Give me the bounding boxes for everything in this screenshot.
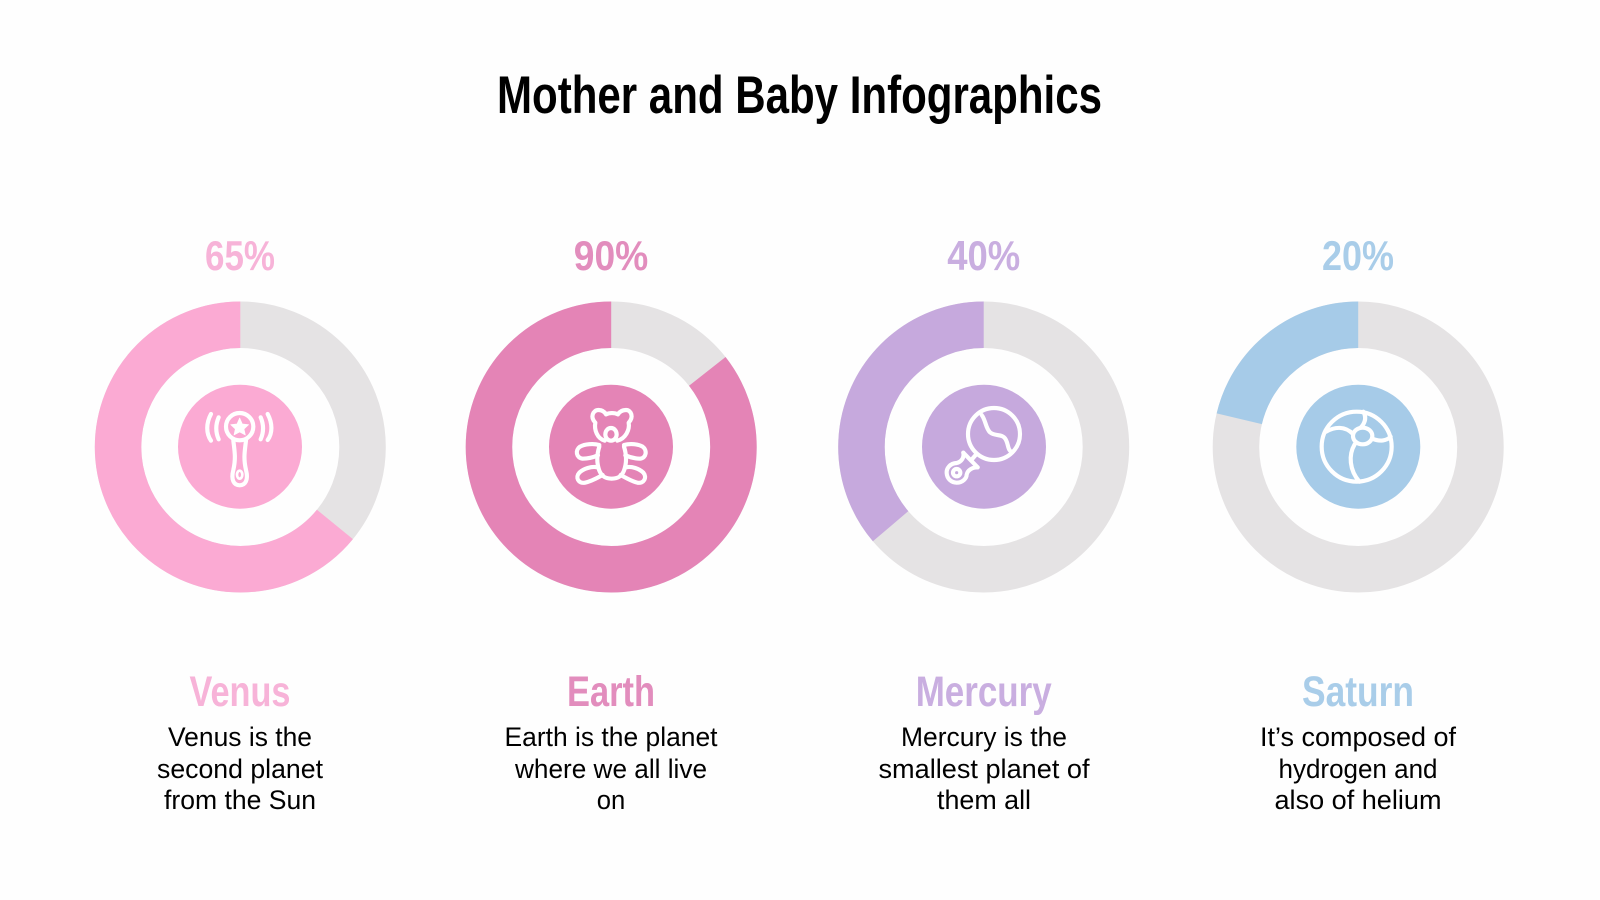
donut chart: 40%	[861, 325, 1106, 569]
icon: beach ball	[1296, 385, 1420, 509]
description: Mercury: Mercury is the	[901, 722, 1067, 752]
percentage: 20%: 20%	[1322, 232, 1394, 279]
description: Venus: second planet	[157, 754, 324, 784]
label: Venus: Venus	[190, 668, 290, 716]
label: Saturn: Saturn	[1302, 668, 1414, 716]
description: Earth: on	[597, 785, 625, 815]
description: Saturn: hydrogen and	[1278, 754, 1438, 784]
description: Saturn: It’s composed of	[1260, 722, 1457, 752]
description: Mercury	[878, 722, 1090, 815]
description: Saturn	[1260, 722, 1457, 815]
donut chart: 65%	[118, 325, 363, 569]
description: Saturn: also of helium	[1274, 785, 1442, 815]
donut chart: 90%	[489, 325, 733, 569]
description: Earth: where we all live	[514, 754, 707, 784]
percentage: 90%: 90%	[574, 232, 648, 279]
percentage: 40%: 40%	[947, 232, 1020, 279]
description: Venus	[157, 722, 324, 815]
description: Venus: Venus is the	[168, 722, 312, 752]
icon: teddy bear	[549, 385, 673, 509]
description: Earth	[504, 722, 718, 815]
label: Earth: Earth	[567, 668, 655, 716]
label: Mercury: Mercury	[916, 668, 1052, 716]
percentage: 65%: 65%	[205, 232, 275, 279]
panel: Earth	[489, 232, 733, 815]
description: Venus: from the Sun	[164, 785, 316, 815]
title: Mother and Baby Infographics	[497, 66, 1102, 125]
icon: rattle with star	[178, 385, 302, 509]
panel: Venus	[118, 232, 363, 815]
panel: Saturn	[1236, 232, 1480, 815]
panel: Mercury	[861, 232, 1106, 815]
description: Mercury: smallest planet of	[878, 754, 1090, 784]
icon: ball rattle	[922, 385, 1046, 509]
donut chart: 20%	[1236, 325, 1480, 569]
description: Mercury: them all	[937, 785, 1031, 815]
description: Earth: Earth is the planet	[504, 722, 718, 752]
